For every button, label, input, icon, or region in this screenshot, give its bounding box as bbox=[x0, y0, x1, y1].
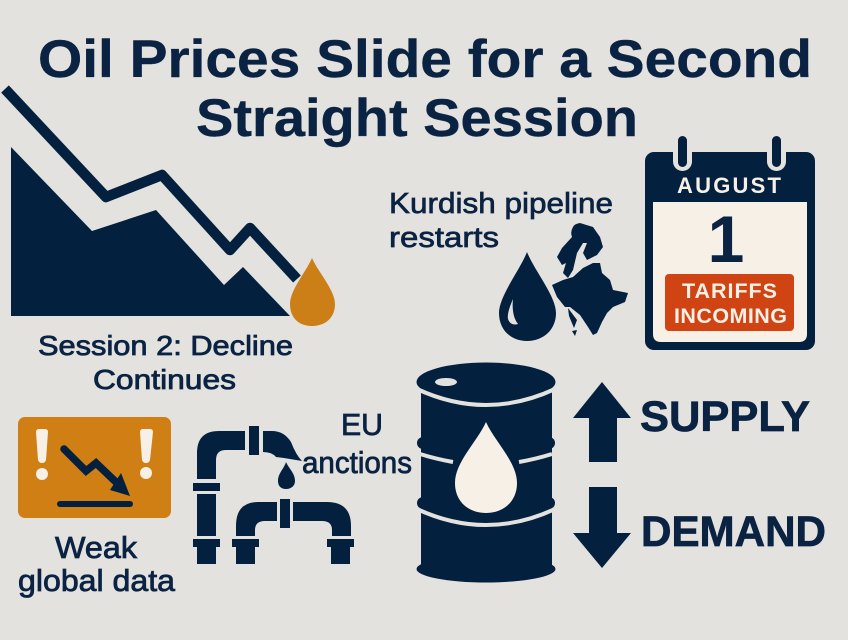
exclamation marks bbox=[36, 429, 153, 480]
barrel body bbox=[421, 392, 552, 572]
falling arrow bbox=[64, 449, 118, 484]
month label: AUGUST bbox=[677, 173, 782, 198]
label: Kurdish pipeline bbox=[389, 188, 613, 254]
tariffs badge bbox=[665, 274, 794, 331]
weak data warning icon bbox=[18, 417, 171, 518]
icon: map of the Kurdish region bbox=[552, 223, 628, 336]
label: Kurdish pipeline: Kurdish pipeline bbox=[389, 188, 613, 220]
calendar body bbox=[645, 152, 815, 350]
barrel drop bbox=[455, 422, 517, 513]
caption: session 2: Session 2: Decline bbox=[38, 330, 293, 361]
caption: weak global data bbox=[18, 530, 176, 598]
chart: falling oil price bbox=[5, 89, 335, 326]
icon: leaking pipes bbox=[193, 426, 354, 564]
calendar rings bbox=[673, 136, 786, 171]
label: EU sanctions bbox=[302, 407, 412, 480]
title bbox=[38, 30, 812, 148]
date number: 1 bbox=[708, 202, 744, 276]
label: EU sanctions: EU bbox=[341, 407, 383, 442]
tariffs badge: TARIFFS bbox=[682, 279, 777, 303]
label: EU sanctions: anctions bbox=[302, 445, 412, 480]
caption: session 2: Continues bbox=[93, 364, 236, 395]
icon: orange oil drop bbox=[290, 258, 335, 326]
area under price line bbox=[11, 147, 290, 316]
label: supply: SUPPLY bbox=[640, 393, 810, 441]
caption: session 2 bbox=[38, 330, 293, 395]
label: Kurdish pipeline: restarts bbox=[389, 222, 499, 254]
label: demand: DEMAND bbox=[641, 508, 826, 556]
caption: weak global data: Weak bbox=[55, 530, 138, 565]
tariffs badge: INCOMING bbox=[674, 304, 787, 328]
arrow: supply up bbox=[573, 382, 631, 462]
arrow: demand down bbox=[573, 487, 631, 568]
calendar bbox=[645, 136, 815, 350]
barrel bands bbox=[417, 437, 431, 449]
title: Straight Session bbox=[196, 89, 638, 148]
calendar page bbox=[653, 202, 807, 342]
caption: weak global data: global data bbox=[18, 563, 176, 598]
icon: dark oil drop bbox=[499, 252, 556, 341]
price line bbox=[5, 89, 297, 279]
icon: oil barrel bbox=[416, 362, 556, 582]
title: Oil Prices Slide for a Second bbox=[38, 30, 812, 89]
